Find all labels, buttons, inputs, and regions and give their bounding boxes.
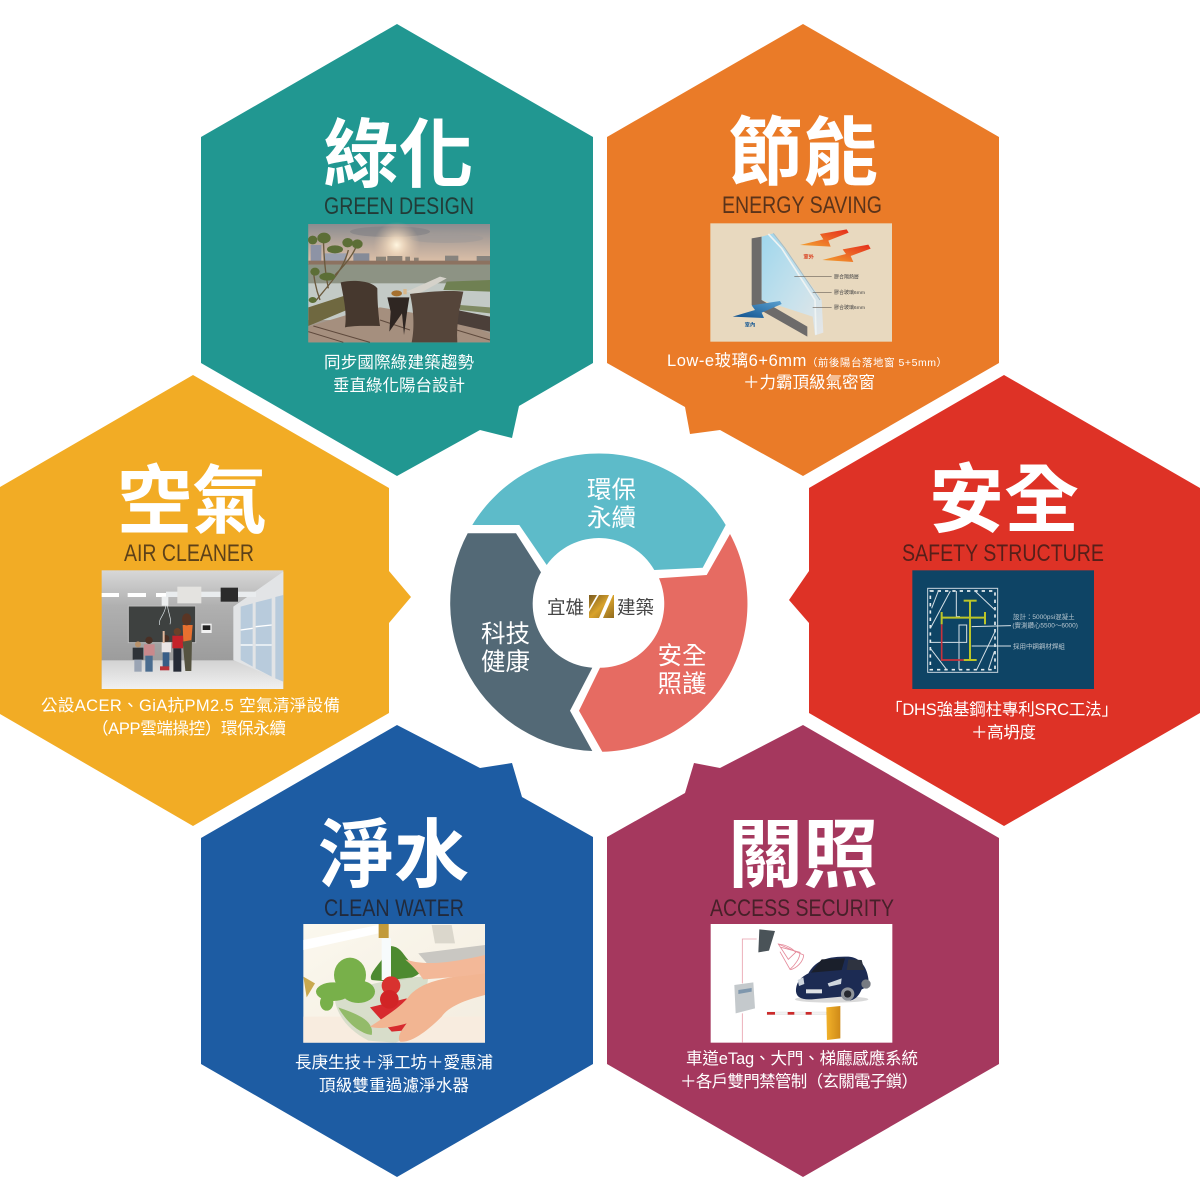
caption <box>680 1048 918 1091</box>
diagram: steel reinforced column <box>912 570 1094 689</box>
photo: washing vegetables <box>303 924 485 1043</box>
caption: （APP雲端操控）環保永續 <box>92 719 286 738</box>
panel: air cleaner <box>0 375 411 826</box>
hexagon: blue <box>201 725 593 1177</box>
subheading: air cleaner: AIR CLEANER <box>124 540 254 567</box>
diagram: eTag gate system <box>711 924 892 1043</box>
subheading: safety structure: SAFETY STRUCTURE <box>902 540 1104 567</box>
panel: green design <box>201 24 593 476</box>
segment: 科技健康: 科技 <box>481 620 530 648</box>
logo: 宜雄建築: 建築 <box>617 597 654 618</box>
heading: 節能: 節能 <box>728 111 878 195</box>
caption: ＋各戶雙門禁管制（玄關電子鎖） <box>680 1072 918 1091</box>
segment: 安全照護: 安全 <box>658 642 706 670</box>
photo: balcony with rattan chairs <box>308 222 490 342</box>
diagram: low-e glass cross-section: 室內 <box>745 321 755 329</box>
caption: 同步國際綠建築趨勢 <box>324 353 474 372</box>
segment: 環保永續: 永續 <box>587 504 636 532</box>
heading: 淨水: 淨水 <box>319 813 469 897</box>
diagram: low-e glass cross-section: 膠合隔熱層 <box>834 273 859 280</box>
segment: 環保永續: 環保 <box>587 476 636 504</box>
caption <box>667 351 947 392</box>
diagram: steel reinforced column: 採用中鋼鋼材焊組 <box>1013 642 1065 651</box>
caption <box>886 700 1118 742</box>
heading: 空氣: 空氣 <box>117 459 267 543</box>
panel: safety structure <box>789 375 1200 826</box>
segment: 科技健康: 健康 <box>481 648 530 676</box>
hexagon: yellow <box>0 375 411 826</box>
heading: 關照: 關照 <box>728 813 878 897</box>
caption: ＋高坍度 <box>971 723 1036 742</box>
segment: 科技健康 <box>450 533 592 751</box>
subheading: energy saving: ENERGY SAVING <box>722 192 882 219</box>
logo: 宜雄建築: 宜雄 <box>547 597 584 618</box>
panel: energy saving <box>607 24 999 476</box>
caption: 垂直綠化陽台設計 <box>333 376 465 395</box>
subheading: access security: ACCESS SECURITY <box>710 895 894 922</box>
panel: access security <box>607 725 999 1177</box>
diagram: steel reinforced column: 設計：5000psi混凝土 <box>1013 612 1075 621</box>
caption: 長庚生技＋淨工坊＋愛惠浦 <box>295 1053 493 1072</box>
caption: 公設ACER、GiA抗PM2.5 空氣清淨設備 <box>41 696 340 715</box>
caption: 「DHS強基鋼柱專利SRC工法」 <box>886 700 1118 719</box>
caption: 車道eTag、大門、梯廳感應系統 <box>686 1048 918 1068</box>
caption <box>41 696 340 738</box>
cycle diagram <box>450 453 747 752</box>
segment: 環保永續 <box>472 453 726 570</box>
caption: 頂級雙重過濾淨水器 <box>319 1076 469 1095</box>
caption <box>324 353 474 395</box>
diagram: low-e glass cross-section <box>710 223 892 342</box>
diagram: low-e glass cross-section: 膠合玻璃6mm <box>834 304 865 311</box>
caption <box>295 1053 493 1095</box>
heading: 安全: 安全 <box>929 458 1079 542</box>
hexagon: green <box>201 24 593 476</box>
photo: family in classroom with air system <box>102 570 283 689</box>
caption: ＋力霸頂級氣密窗 <box>743 373 875 392</box>
segment: 安全照護: 照護 <box>658 670 706 698</box>
hexagon: purple <box>607 725 999 1177</box>
panel: clean water <box>201 725 593 1177</box>
hexagon: orange <box>607 24 999 476</box>
segment: 安全照護 <box>579 534 747 752</box>
hexagon: red <box>789 375 1200 826</box>
subheading: green design: GREEN DESIGN <box>324 193 474 220</box>
diagram: steel reinforced column: (實測鑽心5500～6000) <box>1012 621 1078 630</box>
logo: 宜雄建築 <box>547 595 654 618</box>
diagram: low-e glass cross-section: 膠合玻璃6mm <box>834 289 865 296</box>
heading: 綠化: 綠化 <box>323 113 474 197</box>
caption: Low-e玻璃6+6mm（前後陽台落地窗 5+5mm） <box>667 351 947 370</box>
diagram: low-e glass cross-section: 室外 <box>803 252 815 260</box>
subheading: clean water: CLEAN WATER <box>324 895 464 922</box>
